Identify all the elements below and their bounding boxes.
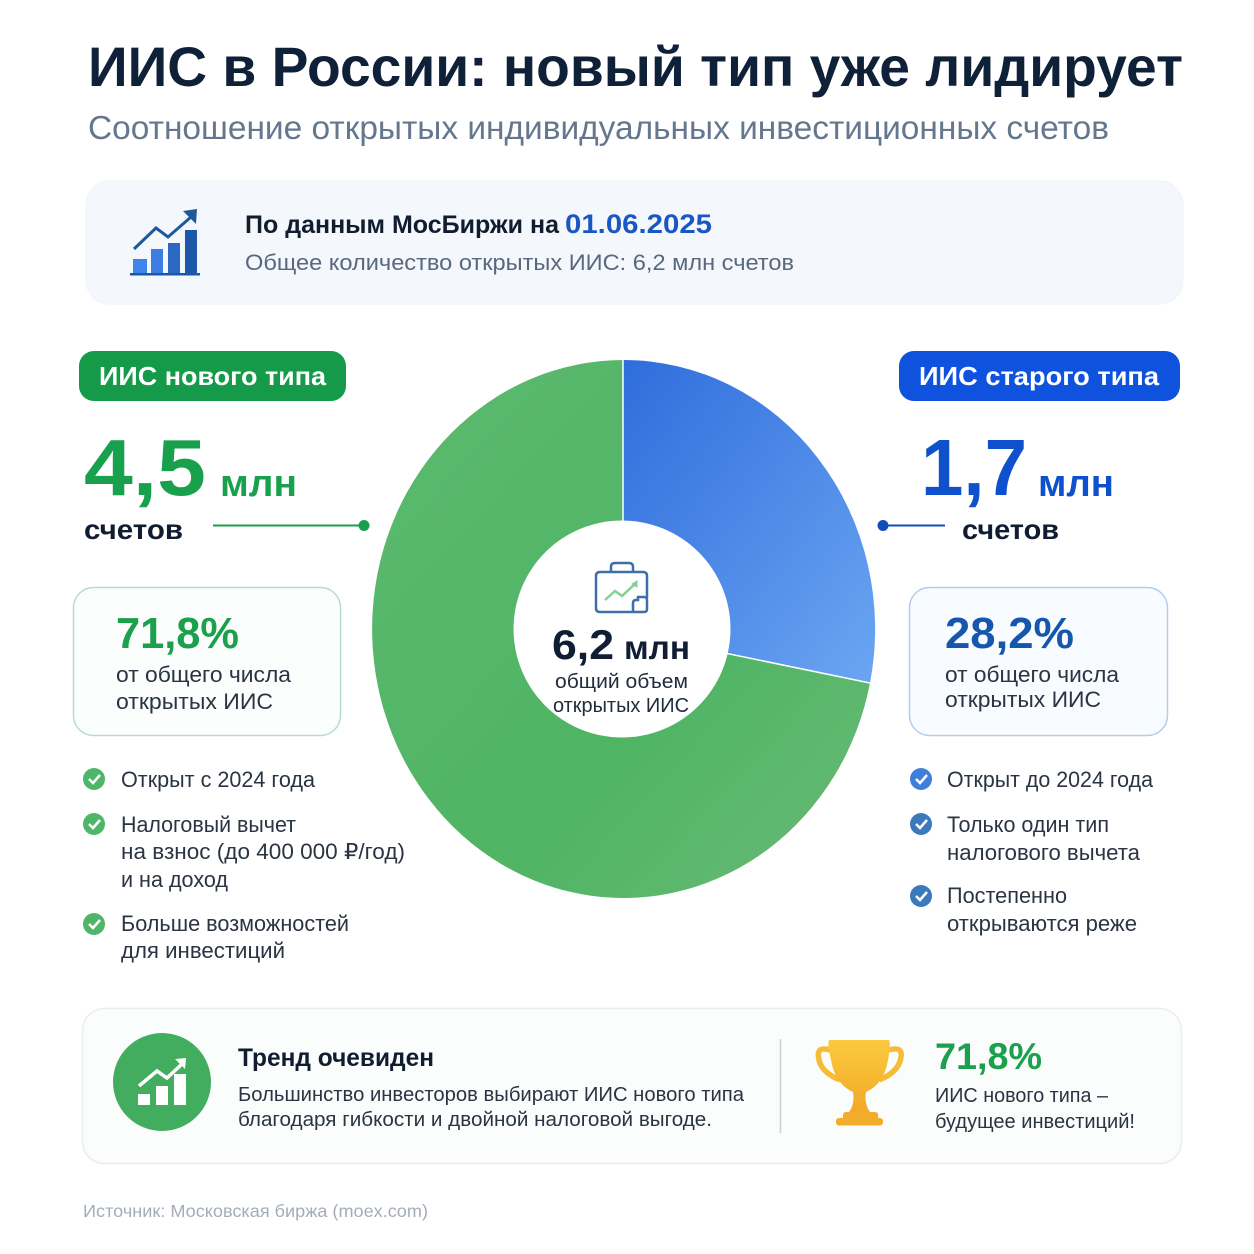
card: 71.8 percent: от общего числа [116,662,292,687]
card: 71.8 percent: 71,8% [116,609,239,658]
value: 1.7 million [921,423,1114,512]
highlight text: будущее инвестиций! [935,1110,1135,1133]
trait 3: Постепенно [947,883,1067,908]
badge: new type: ИИС нового типа [99,361,327,391]
trait 2: Только один тип [947,812,1109,837]
label: accounts: счетов [84,514,183,545]
total caption: открытых ИИС [553,695,689,717]
trait 2 [910,812,1141,865]
icon: trophy [818,1040,901,1126]
benefit 1: Открыт с 2024 года [121,767,316,792]
list: old type traits [910,767,1154,936]
banner subtext: Общее количество открытых ИИС: 6,2 млн счетов [245,250,794,275]
trait 3: открываются реже [947,911,1137,936]
badge: old type: ИИС старого типа [919,361,1160,391]
panel: trend summary [82,1008,1182,1164]
list: new type benefits [83,767,405,963]
card: 71.8 percent: открытых ИИС [116,689,273,714]
total value: млн [624,629,690,666]
card: 71.8 percent [74,588,340,736]
banner heading [245,209,712,239]
donut centre [514,520,730,738]
benefit 3 [83,911,349,963]
value: 1.7 million: 1,7 [921,423,1027,512]
total value: 6,2 [552,621,614,668]
card: 28.2 percent: от общего числа [945,662,1120,687]
highlight text: ИИС нового типа – [935,1084,1109,1107]
trait 2: налогового вычета [947,840,1141,865]
trend text [238,1083,745,1131]
badge: old type [899,351,1180,401]
donut chart [372,360,875,898]
trait 1: Открыт до 2024 года [947,767,1154,792]
subtitle: Соотношение открытых индивидуальных инвестиционных счетов [88,109,1109,146]
benefit 2: и на доход [121,867,228,892]
trend text: благодаря гибкости и двойной налоговой выгоде. [238,1108,712,1131]
total value [552,621,690,668]
benefit 3: для инвестиций [121,938,285,963]
icon: rising bar chart [130,209,200,276]
banner heading: По данным МосБиржи на [245,211,560,239]
panel: new type [74,351,405,963]
value: 4.5 million: млн [220,463,297,505]
icon: briefcase [596,563,647,612]
card: 28.2 percent [910,588,1168,736]
value: 1.7 million: млн [1038,463,1114,505]
title: ИИС в России: новый тип уже лидирует [88,35,1183,98]
highlight text [935,1084,1135,1133]
value: 4.5 million [84,423,297,512]
trend heading: Тренд очевиден [238,1044,434,1072]
highlight value: 71,8% [935,1036,1042,1077]
card: 28.2 percent: открытых ИИС [945,687,1101,712]
icon: trend circle [113,1033,211,1131]
panel: old type [878,351,1180,936]
benefit 2: на взнос (до 400 000 ₽/год) [121,839,405,864]
slice: new type 71.8% [372,360,870,898]
trait 3 [910,883,1137,936]
benefit 2 [83,812,405,892]
value: 4.5 million: 4,5 [84,423,206,512]
connector: old type [878,520,945,531]
card: 28.2 percent: 28,2% [945,609,1074,658]
total caption [553,671,689,717]
total caption: общий объем [555,671,688,693]
badge: new type [79,351,346,401]
trend text: Большинство инвесторов выбирают ИИС нового типа [238,1083,745,1106]
benefit 2: Налоговый вычет [121,812,296,837]
source note: Источник: Московская биржа (moex.com) [83,1201,428,1221]
benefit 3: Больше возможностей [121,911,349,936]
label: accounts: счетов [962,514,1059,545]
panel: data source banner [86,181,1183,304]
connector: new type [213,520,370,531]
banner heading: 01.06.2025 [565,209,712,239]
slice: old type 28.2% [623,360,875,683]
